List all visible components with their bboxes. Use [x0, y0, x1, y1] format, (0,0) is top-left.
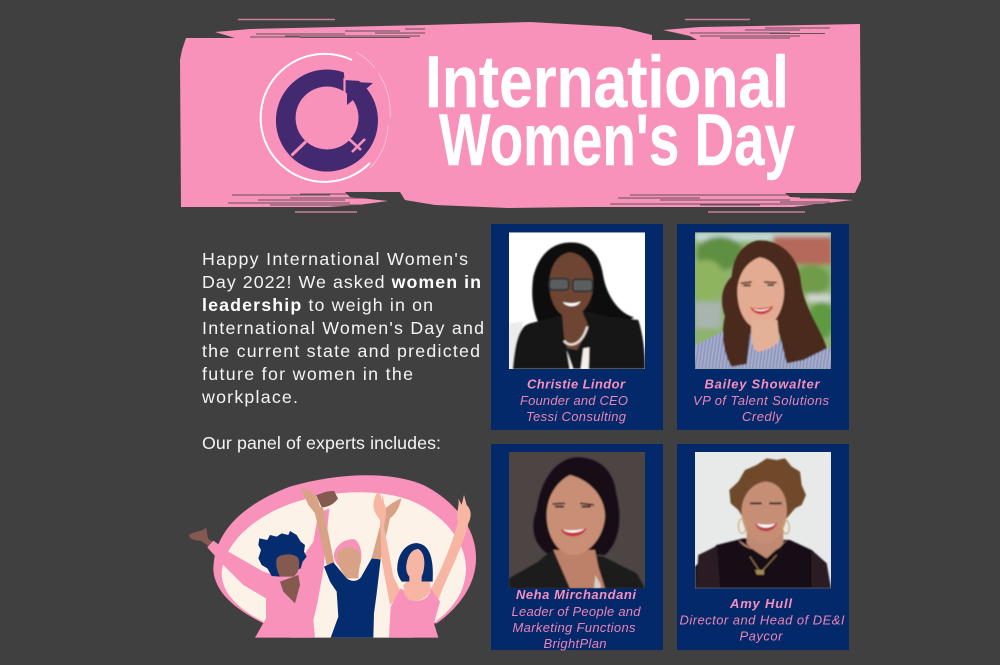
caption: Amy Hull: Amy Hull — [729, 596, 792, 611]
purple ring — [276, 70, 378, 171]
woman left — [189, 487, 338, 638]
photo: Bailey Showalter — [688, 232, 835, 369]
photo: Christie Lindor — [509, 232, 645, 370]
title: Women's Day — [439, 100, 795, 181]
panel: Christie Lindor — [491, 224, 663, 430]
intro text block: the current state and predicted — [202, 341, 480, 361]
caption: Neha Mirchandani — [512, 587, 641, 651]
panel: Neha Mirchandani — [491, 444, 663, 651]
intro text block: International Women's Day and — [202, 318, 484, 338]
caption: Bailey Showalter: Bailey Showalter — [704, 376, 820, 392]
panel: Amy Hull — [677, 444, 849, 650]
icon: ring gap slit — [292, 142, 306, 156]
caption: Neha Mirchandani: Leader of People and — [512, 604, 641, 619]
banner: pink brush stroke — [180, 20, 861, 212]
caption: Bailey Showalter: Credly — [742, 409, 784, 424]
title: International — [425, 42, 789, 123]
photo: Amy Hull — [695, 452, 831, 588]
intro text block: Our panel of experts includes: — [202, 433, 441, 453]
woman middle — [324, 498, 401, 638]
caption: Bailey Showalter: VP of Talent Solutions — [693, 393, 830, 408]
title — [425, 42, 795, 181]
intro text block: future for women in the — [202, 364, 413, 384]
icon: female cross — [349, 139, 365, 152]
caption: Amy Hull: Director and Head of DE&I — [680, 612, 845, 628]
photo: Neha Mirchandani — [509, 452, 645, 588]
backdrop oval — [213, 475, 476, 623]
caption: Neha Mirchandani: Neha Mirchandani — [516, 587, 636, 602]
icon: male arrow — [344, 68, 380, 107]
caption: Neha Mirchandani: Marketing Functions — [512, 620, 636, 635]
caption: Christie Lindor: Christie Lindor — [527, 376, 626, 392]
intro text block: Happy International Women's — [202, 249, 468, 269]
caption: Amy Hull — [680, 596, 845, 644]
caption: Christie Lindor — [520, 376, 628, 424]
caption: Bailey Showalter — [693, 376, 830, 424]
caption: Christie Lindor: Tessi Consulting — [526, 409, 627, 424]
panel: Bailey Showalter — [677, 224, 849, 430]
intro text block: leadership to weigh in on — [202, 295, 433, 315]
intro text block: Day 2022! We asked women in — [202, 272, 481, 292]
intro text block: workplace. — [201, 387, 298, 407]
woman right — [373, 493, 471, 638]
caption: Neha Mirchandani: BrightPlan — [544, 636, 606, 651]
logo: gender equality symbol — [261, 52, 390, 182]
caption: Amy Hull: Paycor — [740, 628, 783, 644]
illustration: three celebrating women — [189, 475, 476, 638]
brush flecks — [238, 20, 805, 212]
intro text block — [201, 249, 484, 453]
caption: Christie Lindor: Founder and CEO — [520, 393, 628, 408]
